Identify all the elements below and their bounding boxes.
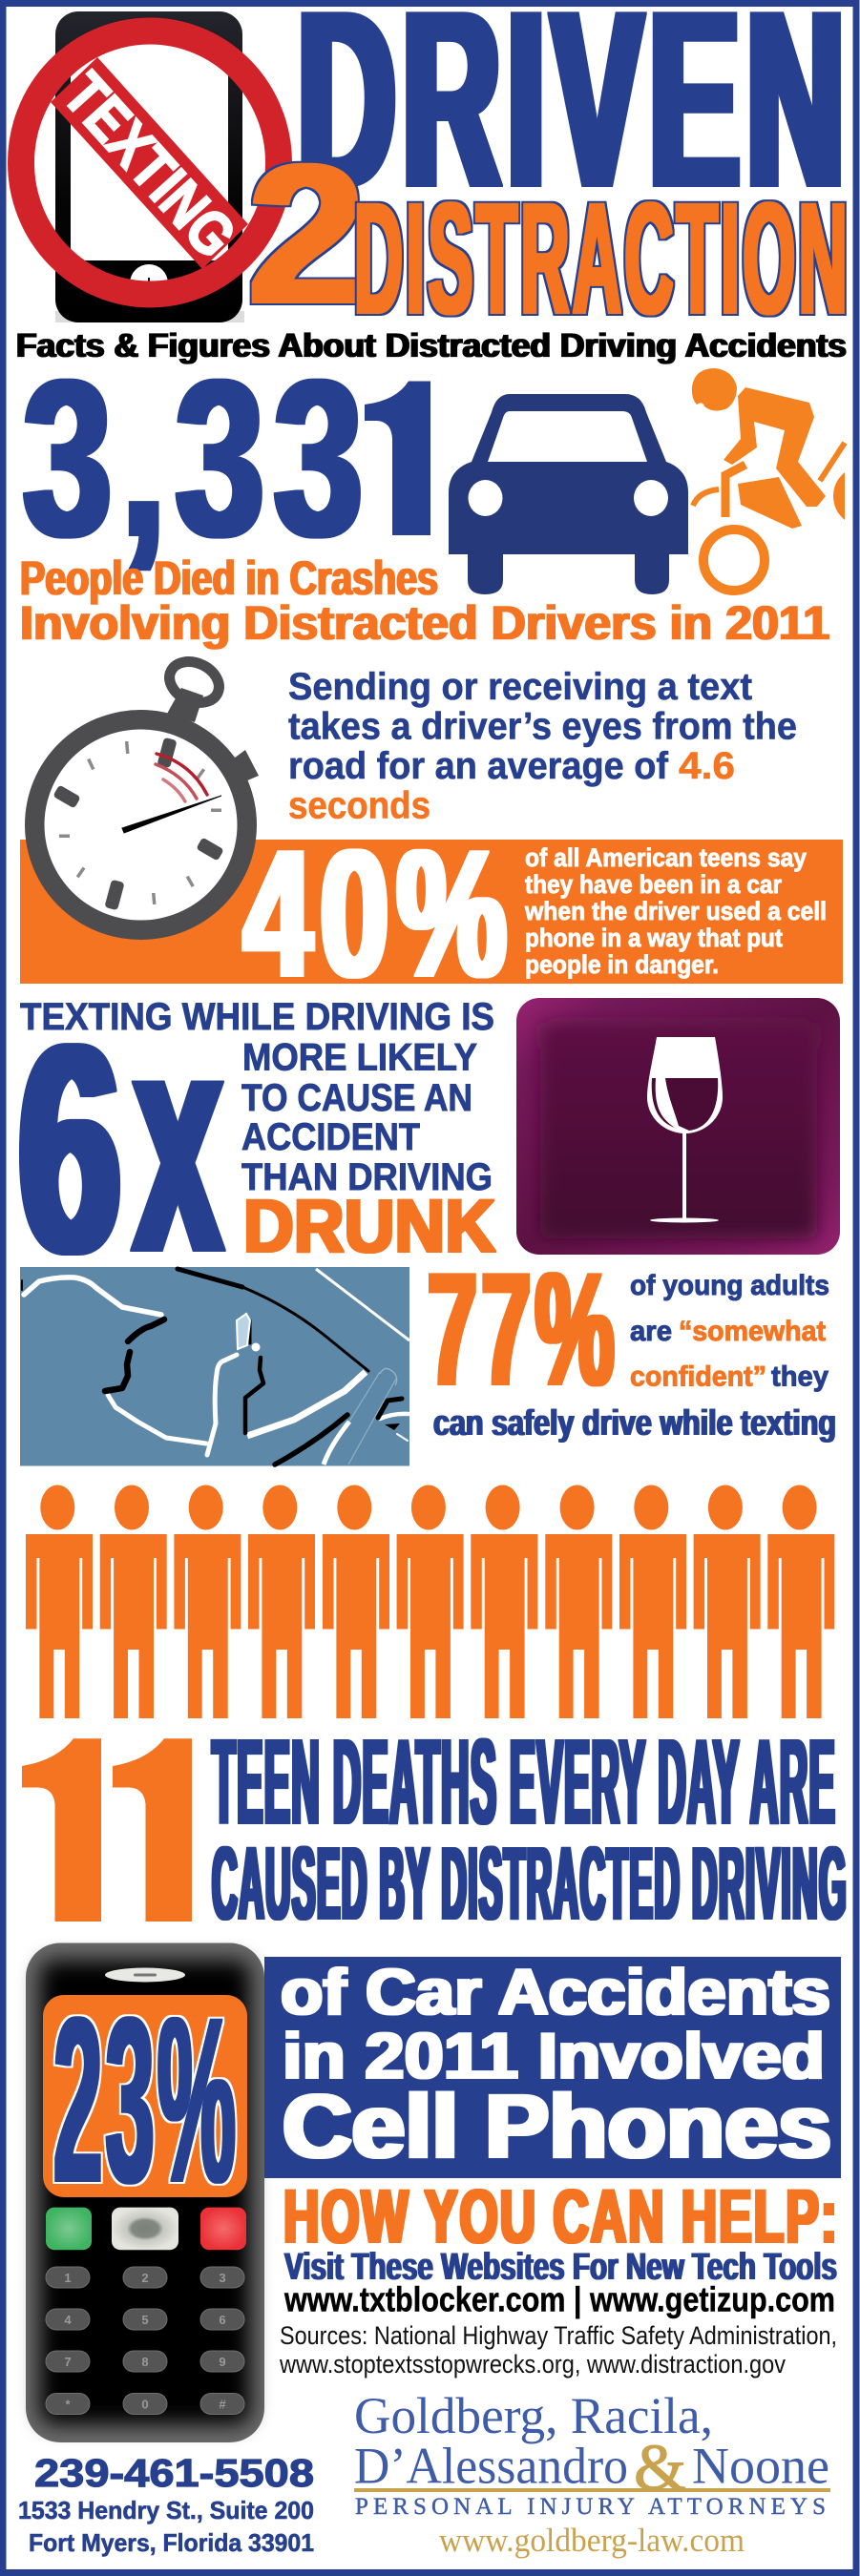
icon: no texting sign over smartphone: TEXTING: [51, 60, 249, 270]
text: 23%: [53, 1969, 239, 2232]
panel: orange 40 percent band: [20, 840, 843, 984]
text: american teens: they have been in a car: [525, 870, 782, 899]
stat: 6x: x: [134, 962, 223, 1319]
logo: law firm: &: [634, 2431, 686, 2503]
stat: 3,331: 1: [369, 333, 435, 583]
text: phone and address: [18, 2451, 314, 2557]
centre button: [112, 2208, 178, 2250]
text: sources: [279, 2321, 837, 2379]
stat: 77 percent: 77%: [428, 1239, 619, 1419]
icon: wine glass tile: [516, 998, 840, 1255]
keypad: 5: [141, 2313, 149, 2327]
chart: eleven person pictogram: [26, 1485, 834, 1718]
text: american teens: people in danger.: [525, 950, 719, 979]
subtitle: facts and figures: Facts & Figures About Distracted Driving Accidents: [16, 327, 847, 364]
red end button: [200, 2208, 246, 2250]
keypad: 7: [64, 2355, 72, 2369]
icon: cyclist: [692, 368, 845, 591]
text: more likely to cause an accident than driving: [241, 1036, 493, 1198]
stat: 6x: 6: [19, 984, 120, 1316]
text: phone and address: Fort Myers, Florida 33901: [29, 2528, 314, 2557]
text: phone and address: 1533 Hendry St., Suite 200: [18, 2496, 314, 2524]
keypad: 0: [141, 2397, 149, 2412]
text: young adults somewhat confident: are: [630, 1316, 672, 1347]
logo: law firm: Noone: [692, 2437, 829, 2494]
text: american teens: of all American teens say: [525, 843, 807, 872]
icon: cell phone with 23 percent: [26, 1942, 264, 2442]
green call button: [46, 2208, 92, 2250]
text: more likely to cause an accident than driving: THAN DRIVING: [241, 1156, 493, 1198]
keypad: #: [219, 2397, 226, 2412]
text: drunk: DRUNK: [243, 1183, 495, 1268]
text: people died in crashes: People Died in Crashes: [20, 551, 438, 605]
keypad: 1: [64, 2271, 72, 2285]
text: involving distracted drivers: Involving Distracted Drivers in 2011: [20, 596, 829, 650]
stat: 3,331: [23, 378, 430, 571]
text: sending or receiving a text: road for an average of: [288, 745, 669, 787]
panel: car accidents in 2011: of Car Accidents: [281, 1956, 830, 2028]
text: sending or receiving a text: seconds: [288, 784, 430, 826]
icon: stopwatch: [25, 654, 259, 940]
image: driver silhouette texting: [20, 1267, 409, 1465]
text: young adults somewhat confident: [630, 1270, 829, 1393]
keypad: [46, 2267, 244, 2414]
icon: car: [449, 394, 688, 594]
text: young adults somewhat confident: confident”: [630, 1361, 766, 1393]
text: more likely to cause an accident than driving: TO CAUSE AN: [241, 1077, 472, 1119]
text: american teens: [524, 843, 827, 979]
logo: law firm: PERSONAL INJURY ATTORNEYS: [355, 2494, 826, 2520]
heading: texting while driving is: TEXTING WHILE DRIVING IS: [20, 996, 494, 1038]
text: sending or receiving a text: [288, 666, 797, 826]
text: more likely to cause an accident than driving: ACCIDENT: [241, 1116, 420, 1158]
keypad: 6: [219, 2313, 226, 2327]
keypad: 2: [141, 2271, 149, 2285]
stat: 40 percent: 40%: [243, 813, 514, 1015]
text: more likely to cause an accident than driving: MORE LIKELY: [242, 1036, 477, 1078]
text: young adults somewhat confident: “somewhat: [679, 1316, 826, 1347]
text: sending or receiving a text: Sending or receiving a text: [288, 666, 752, 708]
keypad: *: [65, 2397, 71, 2412]
stat: 3,331: 3,33: [23, 333, 372, 583]
text: sending or receiving a text: takes a driver’s eyes from the: [288, 706, 797, 748]
text: sending or receiving a text: 4.6: [679, 745, 735, 787]
title: numeral 2: 2: [248, 124, 365, 345]
text: sources: www.stoptextsstopwrecks.org, www.distraction.gov: [279, 2350, 786, 2379]
panel: car accidents in 2011: in 2011 Involved: [283, 2020, 825, 2092]
logo: law firm: Goldberg, Racila,: [354, 2387, 713, 2444]
panel: car accidents in 2011: [264, 1956, 841, 2178]
text: phone and address: 239-461-5508: [34, 2451, 314, 2495]
text: american teens: phone in a way that put: [525, 924, 783, 952]
stat: 11: 11: [21, 1690, 202, 1977]
panel: car accidents in 2011: Cell Phones: [283, 2076, 831, 2177]
keypad: 4: [64, 2313, 72, 2327]
keypad: 3: [219, 2271, 226, 2285]
text: american teens: when the driver used a cell: [524, 897, 827, 925]
keypad: 8: [141, 2355, 149, 2369]
text: young adults somewhat confident: they: [771, 1361, 829, 1393]
keypad: 9: [219, 2355, 226, 2369]
phone screen: [43, 1995, 247, 2197]
logo: law firm: www.goldberg-law.com: [439, 2522, 745, 2559]
logo: law firm: D’Alessandro: [354, 2437, 628, 2494]
text: young adults somewhat confident: of young adults: [630, 1270, 829, 1301]
logo: law firm: [354, 2387, 830, 2559]
icon: no texting sign over smartphone: [21, 11, 279, 322]
